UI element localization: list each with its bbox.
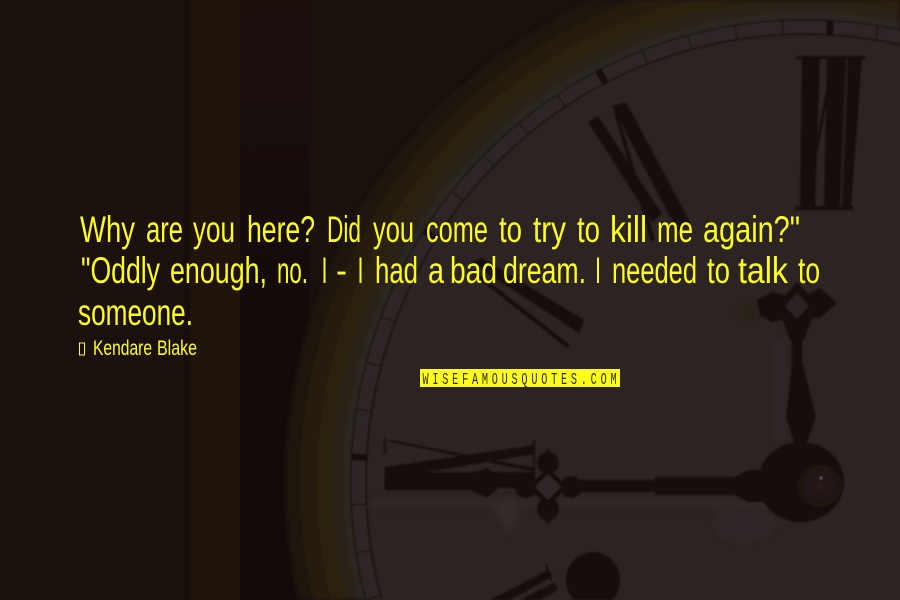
quote line 1: you	[373, 209, 414, 250]
quote line 1: to	[499, 209, 522, 250]
quote line 3: someone.	[78, 292, 193, 333]
quote line 1: Why	[80, 209, 135, 250]
quote line 2: I	[322, 250, 328, 291]
hour hand	[757, 282, 837, 445]
quote line 1: kill	[610, 209, 647, 250]
quote line 2: dream.	[503, 250, 586, 291]
author	[80, 337, 197, 360]
quote line 1: to	[577, 209, 600, 250]
quote line 2: a	[428, 250, 444, 291]
quote line 2: no.	[277, 250, 308, 291]
watermark badge: WISEFAMOUSQUOTES.COM	[422, 371, 620, 390]
quote line 1: come	[426, 209, 488, 250]
quote line 2: had	[375, 250, 418, 291]
numeral: top	[795, 56, 866, 210]
numeral: left upper	[470, 258, 584, 348]
quote line 1: you	[193, 209, 235, 250]
quote line 1: try	[533, 209, 566, 250]
quote line 2: -	[336, 250, 347, 291]
lower winding hole	[566, 552, 620, 600]
author: Blake	[157, 337, 197, 360]
minute hand	[385, 448, 770, 525]
quote line 1: again?"	[703, 209, 800, 250]
numeral: upper left	[588, 102, 690, 242]
quote line 2: talk	[738, 250, 788, 291]
quote line 2: to	[798, 250, 820, 291]
quote line 2: bad	[450, 250, 497, 291]
quote line 1: are	[146, 209, 183, 250]
hand shadows	[370, 303, 787, 543]
quote line 2	[81, 250, 820, 291]
quote line 1: here?	[247, 209, 315, 250]
numeral: left lower	[384, 438, 535, 486]
brass rim	[285, 0, 900, 600]
centre hub	[758, 442, 844, 522]
quote line 1: me	[657, 209, 693, 250]
quote line 2: I	[358, 250, 364, 291]
quote line 1	[80, 209, 800, 250]
quote line 1: Did	[327, 209, 361, 250]
quote line 2: enough,	[170, 250, 267, 291]
quote line 2: to	[707, 250, 730, 291]
quote text	[78, 209, 820, 333]
minute track	[351, 20, 900, 600]
quote line 2: I	[595, 250, 601, 291]
clock face	[351, 20, 900, 600]
numeral: bottom	[490, 565, 558, 600]
quote line 2: "Oddly	[81, 250, 160, 291]
clock	[285, 0, 900, 600]
quote line 2: needed	[612, 250, 697, 291]
author: Kendare	[93, 337, 152, 360]
